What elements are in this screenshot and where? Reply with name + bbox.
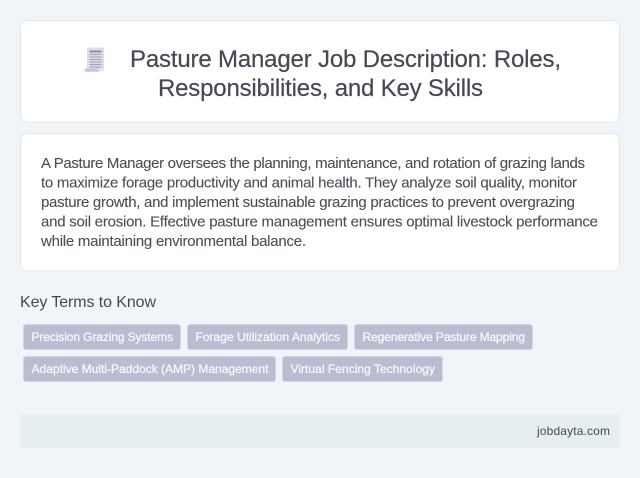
chip: precision grazing systems [24, 324, 180, 350]
description text: A Pasture Manager oversees the planning, maintenance, and rotation of grazing lands [41, 155, 585, 172]
chip: forage utilization analytics [188, 324, 348, 350]
chip: regenerative pasture mapping [354, 324, 532, 350]
chip: forage utilization analytics: Forage Utilization Analytics [196, 330, 340, 344]
chip: virtual fencing technology [282, 356, 442, 382]
description text: while maintaining environmental balance. [40, 233, 306, 250]
chip: precision grazing systems: Precision Grazing Systems [32, 330, 173, 344]
footer site name: jobdayta.com [536, 424, 610, 438]
panel: title header [20, 20, 620, 122]
description text: and soil erosion. Effective pasture management ensures optimal livestock performance [41, 214, 598, 230]
title: Pasture Manager Job Description: Roles, [130, 46, 561, 73]
footer bar [20, 414, 620, 448]
icon: document scroll [84, 48, 104, 72]
description text [40, 155, 598, 250]
description text: to maximize forage productivity and animal health. They analyze soil quality, monitor [41, 174, 577, 192]
panel: description [20, 134, 620, 271]
heading: key terms: Key Terms to Know [20, 294, 156, 311]
chip: virtual fencing technology: Virtual Fencing Technology [290, 362, 435, 376]
description text: pasture growth, and implement sustainable grazing practices to prevent overgrazing [41, 194, 575, 211]
title [130, 46, 561, 102]
title: Responsibilities, and Key Skills [158, 75, 483, 102]
chip: regenerative pasture mapping: Regenerative Pasture Mapping [362, 330, 525, 344]
chip: adaptive multi-paddock management [24, 356, 276, 382]
key terms chips [24, 324, 532, 382]
chip: adaptive multi-paddock management: Adaptive Multi-Paddock (AMP) Management [32, 362, 269, 376]
